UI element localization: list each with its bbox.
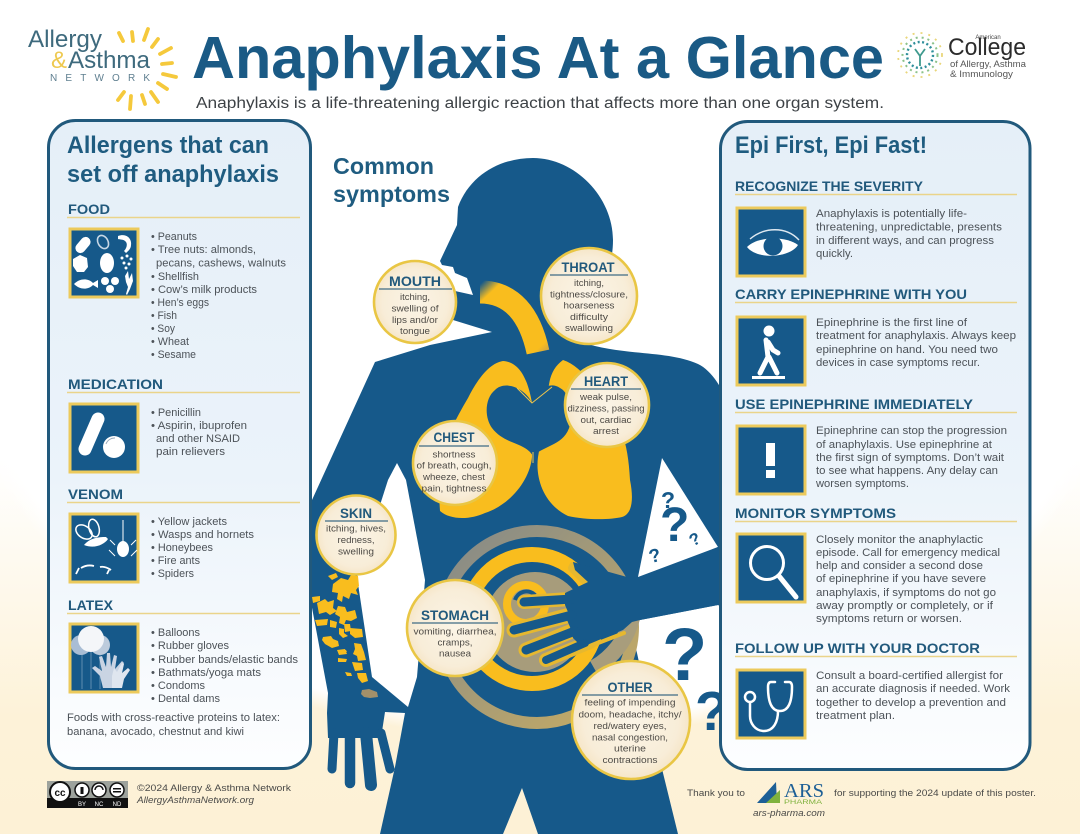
- hand on stomach: [514, 547, 718, 660]
- symptom: mouth: MOUTH: [389, 274, 441, 289]
- section: follow up: FOLLOW UP WITH YOUR DOCTOR: [735, 640, 980, 656]
- question marks: ?: [660, 499, 689, 552]
- panel heading: epi first: Epi First, Epi Fast!: [735, 132, 927, 159]
- section: monitor symptoms: away promptly or completely, or if: [816, 600, 994, 612]
- section: follow up: Consult a board-certified allergist for: [816, 670, 1003, 682]
- title: Anaphylaxis At a Glance: [192, 25, 884, 91]
- logo: American College of Allergy, Asthma & Immunology: of Allergy, Asthma: [950, 59, 1027, 70]
- icon: eye: [737, 208, 805, 276]
- panel heading: allergens: Allergens that can: [67, 132, 269, 159]
- symptom: throat: THROAT: [562, 260, 615, 275]
- section: recognize the severity: threatening, unpredictable, presents: [816, 222, 1003, 234]
- section: monitor symptoms: episode. Call for emergency medical: [816, 547, 1000, 559]
- list: food: [151, 231, 287, 361]
- section: use epinephrine immediately: USE EPINEPHRINE IMMEDIATELY: [735, 396, 974, 412]
- section: monitor symptoms: MONITOR SYMPTOMS: [735, 505, 896, 521]
- list: latex: • Dental dams: [151, 693, 220, 705]
- section: monitor symptoms: of epinephrine if you have severe: [816, 573, 986, 585]
- section: monitor symptoms: symptoms return or worsen.: [816, 613, 962, 625]
- section: follow up: [735, 640, 1017, 738]
- section: recognize the severity: in different ways, and can progress: [816, 235, 995, 247]
- logo: Allergy & Asthma Network: &: [51, 47, 67, 74]
- section: recognize the severity: Anaphylaxis is potentially life-: [816, 208, 967, 220]
- symptom: heart: [565, 363, 649, 447]
- icon: food: [70, 229, 138, 297]
- section: use epinephrine immediately: worsen symptoms.: [815, 478, 909, 490]
- symptom: throat: hoarseness: [564, 300, 615, 312]
- question marks: ?: [686, 529, 704, 550]
- icon: medication: [70, 404, 138, 472]
- section: use epinephrine immediately: [735, 396, 1017, 494]
- symptom: mouth: swelling of: [392, 304, 439, 314]
- symptom: stomach: [407, 580, 503, 676]
- icon: exclamation mark: [737, 426, 805, 494]
- logo: Allergy & Asthma Network: [28, 26, 176, 109]
- symptom: stomach: STOMACH: [421, 608, 489, 623]
- note: cross-reactive foods: banana, avocado, chestnut and kiwi: [67, 726, 244, 738]
- panel: epi first: [720, 122, 1030, 770]
- section: use epinephrine immediately: to see what happens. Any delay can: [816, 465, 998, 477]
- heading: common symptoms: [333, 153, 450, 207]
- note: cross-reactive foods: [67, 712, 280, 738]
- heading: common symptoms: Common: [333, 153, 434, 179]
- question marks: ?: [647, 545, 663, 568]
- symptom: mouth: tongue: [400, 326, 430, 337]
- copyright: [136, 783, 291, 806]
- section: monitor symptoms: help and consider a second dose: [816, 560, 983, 572]
- section: follow up: an accurate diagnosis if needed. Work: [816, 683, 1011, 695]
- icon: latex: [70, 624, 138, 692]
- logo: American College of Allergy, Asthma & Immunology: [898, 33, 1027, 80]
- list: latex: • Rubber bands/elastic bands: [151, 654, 299, 666]
- list: venom: • Spiders: [151, 568, 194, 580]
- symptom: stomach: cramps,: [438, 638, 472, 648]
- section: monitor symptoms: [735, 505, 1017, 625]
- symptom: other: nasal congestion,: [592, 732, 668, 744]
- section: recognize the severity: RECOGNIZE THE SEVERITY: [735, 178, 924, 194]
- list: venom: • Yellow jackets: [151, 516, 227, 528]
- skin rash on forearm: [312, 573, 378, 698]
- symptom: mouth: lips and/or: [392, 315, 439, 326]
- section: carry epinephrine: devices in case symptoms recur.: [816, 357, 980, 369]
- list: medication: • Aspirin, ibuprofen: [151, 420, 247, 432]
- symptom: other: contractions: [602, 755, 658, 766]
- creative commons badge: [47, 781, 128, 808]
- note: cross-reactive foods: Foods with cross-reactive proteins to latex:: [67, 712, 280, 724]
- sponsor credit: ars-pharma.com: [753, 808, 825, 819]
- list: food: • Tree nuts: almonds,: [151, 244, 256, 256]
- list: food: • Shellfish: [151, 271, 199, 283]
- section: follow up: treatment plan.: [816, 710, 895, 722]
- symptom: other: uterine: [614, 744, 646, 754]
- symptom: chest: of breath, cough,: [416, 460, 492, 472]
- symptom: skin: redness,: [338, 535, 374, 546]
- section: recognize the severity: [735, 178, 1017, 276]
- list: food: • Hen’s eggs: [151, 297, 209, 309]
- symptom: mouth: itching,: [400, 292, 430, 303]
- list: latex: [151, 627, 299, 705]
- symptom: chest: CHEST: [434, 430, 475, 445]
- sponsor credit: Thank you to: [687, 788, 745, 799]
- list: medication: and other NSAID: [156, 433, 240, 445]
- list: venom: [151, 516, 254, 580]
- sponsor credit: PHARMA: [784, 799, 823, 806]
- lungs and trachea: [437, 292, 632, 519]
- symptom: skin: itching, hives,: [326, 524, 386, 534]
- icon: walking person: [737, 317, 805, 385]
- symptom: other: [572, 661, 690, 779]
- list: food: pecans, cashews, walnuts: [156, 258, 287, 270]
- sponsor credit: ARS: [784, 780, 824, 802]
- symptom: other: OTHER: [608, 680, 653, 695]
- symptom: skin: SKIN: [340, 506, 372, 521]
- icon: venom: [70, 514, 138, 582]
- symptom: chest: [413, 421, 497, 505]
- list: latex: • Balloons: [151, 627, 200, 639]
- logo: Allergy & Asthma Network: NETWORK: [50, 73, 150, 84]
- section heading: latex: LATEX: [68, 597, 114, 613]
- list: venom: • Fire ants: [151, 555, 200, 567]
- symptom: skin: [316, 496, 396, 574]
- question marks: [647, 487, 729, 742]
- list: food: • Peanuts: [151, 231, 197, 243]
- list: medication: pain relievers: [156, 446, 226, 458]
- symptom: chest: pain, tightness: [422, 484, 487, 494]
- creative commons badge: ND: [113, 802, 122, 808]
- list: latex: • Bathmats/yoga mats: [151, 667, 262, 679]
- list: venom: • Honeybees: [151, 542, 213, 554]
- creative commons badge: cc: [54, 788, 66, 799]
- logo: American College of Allergy, Asthma & Immunology: College: [948, 34, 1026, 61]
- sponsor credit: [687, 780, 1036, 819]
- panel: allergens: [48, 120, 310, 768]
- section: carry epinephrine: CARRY EPINEPHRINE WITH YOU: [735, 286, 967, 302]
- symptom: stomach: nausea: [439, 648, 472, 660]
- question marks: ?: [661, 487, 675, 513]
- list: food: • Fish: [151, 310, 177, 322]
- creative commons badge: NC: [95, 802, 104, 808]
- symptom: chest: wheeze, chest: [422, 472, 485, 483]
- list: food: • Sesame: [151, 349, 196, 361]
- question marks: ?: [695, 680, 729, 742]
- sponsor credit: for supporting the 2024 update of this poster.: [834, 788, 1036, 799]
- section: use epinephrine immediately: Epinephrine can stop the progression: [816, 425, 1007, 437]
- symptom: throat: swallowing: [565, 323, 613, 334]
- panel heading: allergens: [67, 132, 279, 188]
- symptom: heart: HEART: [584, 374, 629, 389]
- section heading: medication: MEDICATION: [68, 376, 163, 392]
- section: follow up: together to develop a prevention and: [816, 697, 1006, 709]
- logo: Allergy & Asthma Network: Asthma: [68, 47, 151, 74]
- section: carry epinephrine: [735, 286, 1017, 385]
- symptom: heart: out, cardiac: [580, 415, 632, 426]
- section: monitor symptoms: Closely monitor the anaphylactic: [816, 534, 984, 546]
- symptom: other: red/watery eyes,: [594, 721, 666, 732]
- list: latex: • Rubber gloves: [151, 640, 229, 652]
- symptom: heart: dizziness, passing: [568, 404, 644, 414]
- panel heading: allergens: set off anaphylaxis: [67, 161, 279, 188]
- icon: stethoscope: [737, 670, 805, 738]
- symptom: throat: [541, 248, 637, 344]
- list: food: • Wheat: [151, 336, 189, 348]
- heart: [487, 385, 571, 463]
- symptom: stomach: vomiting, diarrhea,: [414, 626, 496, 638]
- section: use epinephrine immediately: the first sign of symptoms. Don’t wait: [816, 452, 1004, 464]
- list: venom: • Wasps and hornets: [151, 529, 254, 541]
- section: carry epinephrine: epinephrine on hand. You need two: [816, 344, 998, 356]
- symptom: throat: itching,: [574, 278, 604, 289]
- copyright: AllergyAsthmaNetwork.org: [136, 795, 255, 806]
- symptom: other: doom, headache, itchy/: [578, 710, 682, 720]
- stomach rings: [441, 531, 633, 723]
- symptom: throat: difficulty: [570, 312, 608, 323]
- body silhouette: [296, 158, 730, 834]
- section: use epinephrine immediately: of anaphylaxis. Use epinephrine at: [816, 439, 992, 451]
- copyright: ©2024 Allergy & Asthma Network: [137, 783, 291, 794]
- section: monitor symptoms: anaphylaxis, if symptoms do not go: [816, 587, 996, 599]
- symptom: chest: shortness: [432, 450, 476, 460]
- section: carry epinephrine: treatment for anaphylaxis. Always keep: [816, 330, 1016, 342]
- list: food: • Soy: [151, 323, 175, 335]
- section heading: venom: VENOM: [68, 486, 123, 502]
- logo: American College of Allergy, Asthma & Immunology: American: [975, 35, 1001, 41]
- creative commons badge: BY: [78, 802, 86, 808]
- symptom: heart: arrest: [593, 426, 619, 437]
- symptom: heart: weak pulse,: [579, 392, 632, 403]
- symptom: throat: tightness/closure,: [550, 290, 628, 300]
- list: medication: • Penicillin: [151, 407, 201, 419]
- heading: common symptoms: symptoms: [333, 181, 450, 207]
- list: medication: [151, 407, 247, 458]
- section: recognize the severity: quickly.: [816, 248, 853, 260]
- subtitle: Anaphylaxis is a life-threatening allergic reaction that affects more than one organ system.: [196, 95, 884, 112]
- symptom: mouth: [374, 261, 456, 343]
- list: food: • Cow’s milk products: [151, 284, 258, 296]
- section: carry epinephrine: Epinephrine is the first line of: [816, 317, 968, 329]
- question marks: ?: [662, 613, 707, 696]
- list: latex: • Condoms: [151, 680, 205, 692]
- section heading: food: FOOD: [68, 201, 110, 217]
- logo: Allergy & Asthma Network: Allergy: [28, 26, 102, 53]
- icon: magnifying glass: [737, 534, 805, 602]
- logo: American College of Allergy, Asthma & Immunology: & Immunology: [950, 69, 1013, 80]
- symptom: skin: swelling: [338, 546, 374, 558]
- symptom: other: feeling of impending: [584, 698, 676, 708]
